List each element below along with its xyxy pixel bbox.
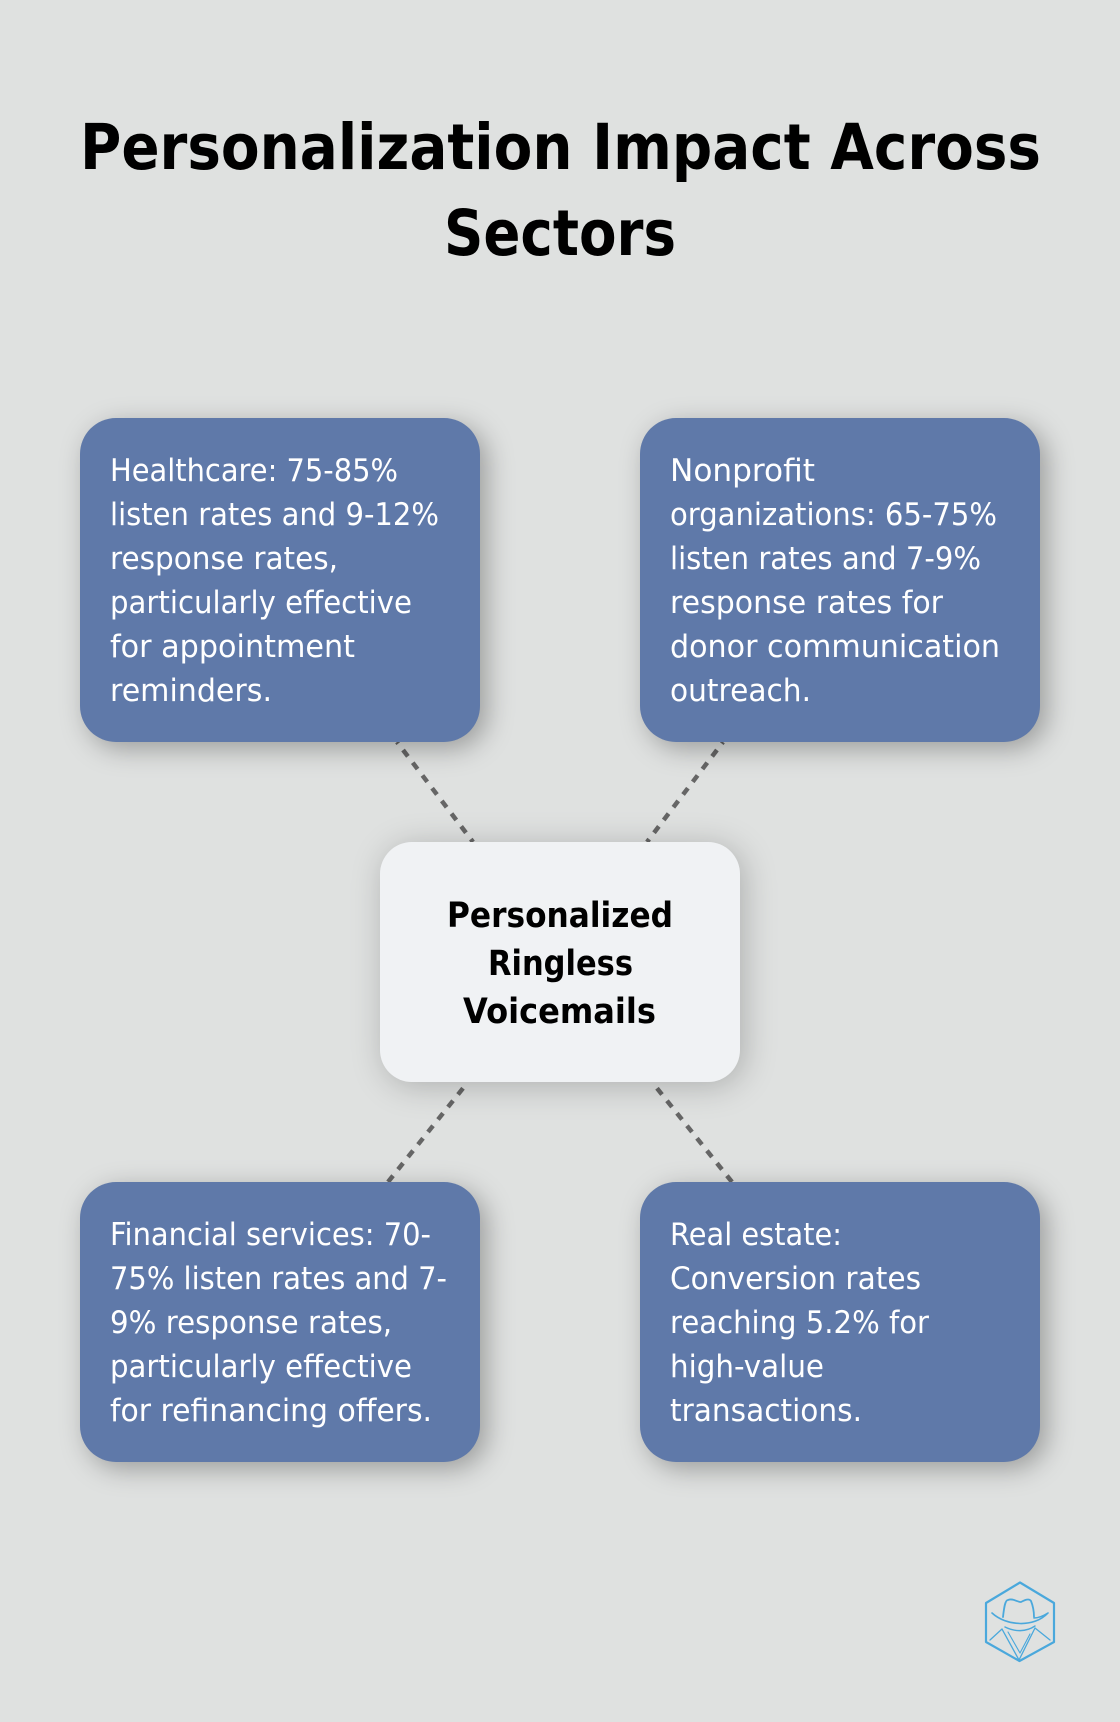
panel: center topic [380, 842, 740, 1082]
panel: healthcare: for appointment [110, 629, 355, 665]
title: Sectors [444, 197, 676, 270]
panel: real estate: Real estate: [670, 1217, 842, 1253]
panel: nonprofit organizations: outreach. [670, 673, 811, 709]
panel: nonprofit organizations: donor communication [670, 629, 1000, 665]
panel: nonprofit organizations: Nonprofit [670, 453, 815, 489]
panel: financial services [80, 1182, 480, 1462]
panel: center topic: Personalized [447, 896, 673, 936]
panel: healthcare: response rates, [110, 541, 338, 577]
panel: nonprofit organizations: response rates for [670, 585, 943, 621]
panel: center topic: Voicemails [463, 992, 656, 1032]
panel: nonprofit organizations [640, 418, 1040, 742]
panel: center topic: Ringless [488, 944, 633, 984]
panel: real estate: reaching 5.2% for [670, 1305, 929, 1341]
panel: financial services: 9% response rates, [110, 1305, 392, 1341]
panel: real estate: high-value [670, 1349, 824, 1385]
panel: healthcare [80, 418, 480, 742]
panel: financial services: for refinancing offers. [110, 1393, 432, 1429]
panel: financial services: 75% listen rates and 7- [110, 1261, 447, 1297]
dashed connectors [388, 742, 732, 1182]
panel: healthcare: particularly effective [110, 585, 412, 621]
panel: nonprofit organizations: organizations: 65-75% [670, 497, 997, 533]
panel: real estate: Conversion rates [670, 1261, 921, 1297]
panel: real estate: transactions. [670, 1393, 862, 1429]
panel: healthcare: reminders. [110, 673, 272, 709]
icon: hexagon spy logo [986, 1582, 1054, 1661]
title [80, 111, 1041, 270]
panel: real estate [640, 1182, 1040, 1462]
panel: nonprofit organizations: listen rates and 7-9% [670, 541, 981, 577]
panel: financial services: Financial services: 70- [110, 1217, 431, 1253]
panel: healthcare: Healthcare: 75-85% [110, 453, 398, 489]
panel: healthcare: listen rates and 9-12% [110, 497, 439, 533]
panel: financial services: particularly effective [110, 1349, 412, 1385]
